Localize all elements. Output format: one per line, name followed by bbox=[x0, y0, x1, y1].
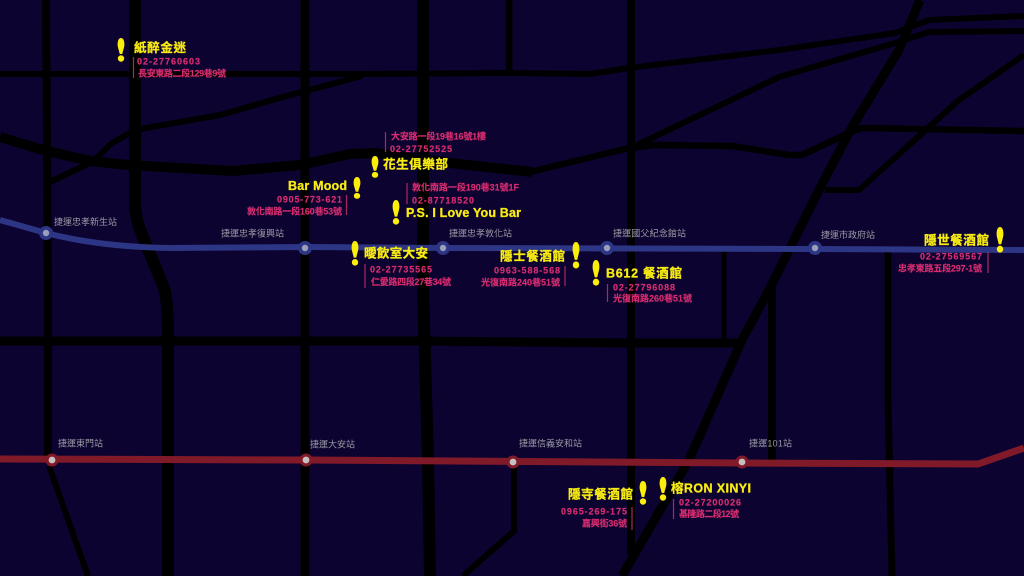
venue: 隱世餐酒館: 忠孝東路五段297-1號 bbox=[898, 262, 982, 274]
venue: 隱寺餐酒館 bbox=[561, 481, 646, 530]
venue: 榕RON XINYI: 02-27200026 bbox=[679, 498, 741, 508]
MRT blue line bbox=[0, 216, 1024, 255]
venue: 隱士餐酒館: 光復南路240巷51號 bbox=[481, 276, 560, 288]
venue: 紙醉金迷: 紙醉金迷 bbox=[134, 40, 186, 55]
station: Dongmen bbox=[46, 438, 103, 466]
venue: 花生俱樂部: 花生俱樂部 bbox=[383, 156, 448, 172]
venue: B612 餐酒館: 光復南路260巷51號 bbox=[613, 292, 692, 304]
station: Zhongxiao Fuxing bbox=[221, 228, 312, 255]
venue: 紙醉金迷: 長安東路二段129巷9號 bbox=[138, 68, 226, 78]
venue: P.S. I Love You Bar: P.S. I Love You Bar bbox=[406, 206, 521, 220]
icon: exclamation mark bbox=[660, 477, 666, 501]
station: Dongmen: 捷運東門站 bbox=[58, 438, 103, 448]
icon: exclamation mark bbox=[393, 200, 399, 225]
icon: exclamation mark bbox=[997, 227, 1003, 253]
venue: 花生俱樂部: 02-27752525 bbox=[390, 144, 452, 154]
station: Daan bbox=[300, 438, 355, 466]
venue: Bar Mood: 0905-773-621 bbox=[277, 194, 342, 204]
venue: P.S. I Love You Bar: 敦化南路一段190巷31號1F bbox=[412, 182, 520, 192]
venue: 隱寺餐酒館: 0965-269-175 bbox=[561, 506, 627, 516]
station: Zhongxiao Xinsheng bbox=[39, 216, 117, 240]
venue: 榕RON XINYI: 榕RON XINYI bbox=[671, 480, 751, 496]
icon: exclamation mark bbox=[354, 177, 360, 199]
icon: exclamation mark bbox=[573, 242, 579, 269]
venue: P.S. I Love You Bar bbox=[393, 182, 521, 225]
venue: 曖飲室大安: 02-27735565 bbox=[370, 264, 432, 274]
venue: 隱世餐酒館: 隱世餐酒館 bbox=[924, 232, 989, 248]
venue: 紙醉金迷: 02-27760603 bbox=[137, 56, 200, 66]
venue: 榕RON XINYI bbox=[660, 477, 751, 519]
icon: exclamation mark bbox=[372, 156, 378, 178]
MRT red line bbox=[0, 438, 1024, 468]
station: Daan: 捷運大安站 bbox=[310, 438, 355, 450]
venue: Bar Mood: 敦化南路一段160巷53號 bbox=[247, 206, 342, 216]
station: Zhongxiao Dunhua bbox=[436, 228, 512, 255]
icon: exclamation mark bbox=[640, 481, 646, 505]
venue: B612 餐酒館 bbox=[593, 260, 692, 304]
venue: 榕RON XINYI: 基隆路二段12號 bbox=[679, 508, 739, 519]
venue: 隱世餐酒館: 02-27569567 bbox=[920, 252, 982, 262]
station: Taipei 101: 捷運101站 bbox=[749, 438, 792, 448]
venue: 花生俱樂部 bbox=[372, 130, 486, 178]
venue: 紙醉金迷 bbox=[118, 38, 226, 78]
venue: 曖飲室大安 bbox=[352, 241, 451, 288]
venue: 隱世餐酒館 bbox=[898, 227, 1003, 274]
icon: exclamation mark bbox=[593, 260, 599, 286]
venue: Bar Mood bbox=[247, 177, 360, 216]
venue: 花生俱樂部: 大安路一段19巷16號1樓 bbox=[391, 130, 486, 142]
station: Sun Yat-sen Memorial Hall bbox=[600, 228, 686, 255]
venue: B612 餐酒館: 02-27796088 bbox=[613, 282, 675, 292]
icon: exclamation mark bbox=[118, 38, 124, 62]
station: City Hall: 捷運市政府站 bbox=[821, 229, 875, 240]
venue: 隱寺餐酒館: 嘉興街36號 bbox=[582, 518, 627, 528]
station: Zhongxiao Dunhua: 捷運忠孝敦化站 bbox=[449, 228, 512, 238]
venue: Bar Mood: Bar Mood bbox=[288, 179, 347, 193]
venue: 曖飲室大安: 仁愛路四段27巷34號 bbox=[371, 276, 451, 287]
venue: 隱士餐酒館: 隱士餐酒館 bbox=[500, 248, 565, 264]
venue: 隱士餐酒館 bbox=[481, 242, 579, 288]
station: Zhongxiao Fuxing: 捷運忠孝復興站 bbox=[221, 228, 284, 238]
icon: exclamation mark bbox=[352, 241, 358, 266]
venue: 隱士餐酒館: 0963-588-568 bbox=[494, 266, 560, 276]
station: Zhongxiao Xinsheng: 捷運忠孝新生站 bbox=[54, 216, 117, 227]
venue: 隱寺餐酒館: 隱寺餐酒館 bbox=[568, 486, 633, 502]
venue: P.S. I Love You Bar: 02-87718520 bbox=[412, 196, 474, 206]
station: Taipei 101 bbox=[736, 438, 792, 468]
station: Xinyi Anhe: 捷運信義安和站 bbox=[519, 438, 582, 448]
station: Xinyi Anhe bbox=[506, 438, 582, 468]
venue: B612 餐酒館: B612 餐酒館 bbox=[606, 266, 682, 280]
station: Sun Yat-sen Memorial Hall: 捷運國父紀念館站 bbox=[613, 228, 686, 238]
station: City Hall bbox=[808, 229, 875, 255]
venue: 曖飲室大安: 曖飲室大安 bbox=[364, 246, 428, 260]
